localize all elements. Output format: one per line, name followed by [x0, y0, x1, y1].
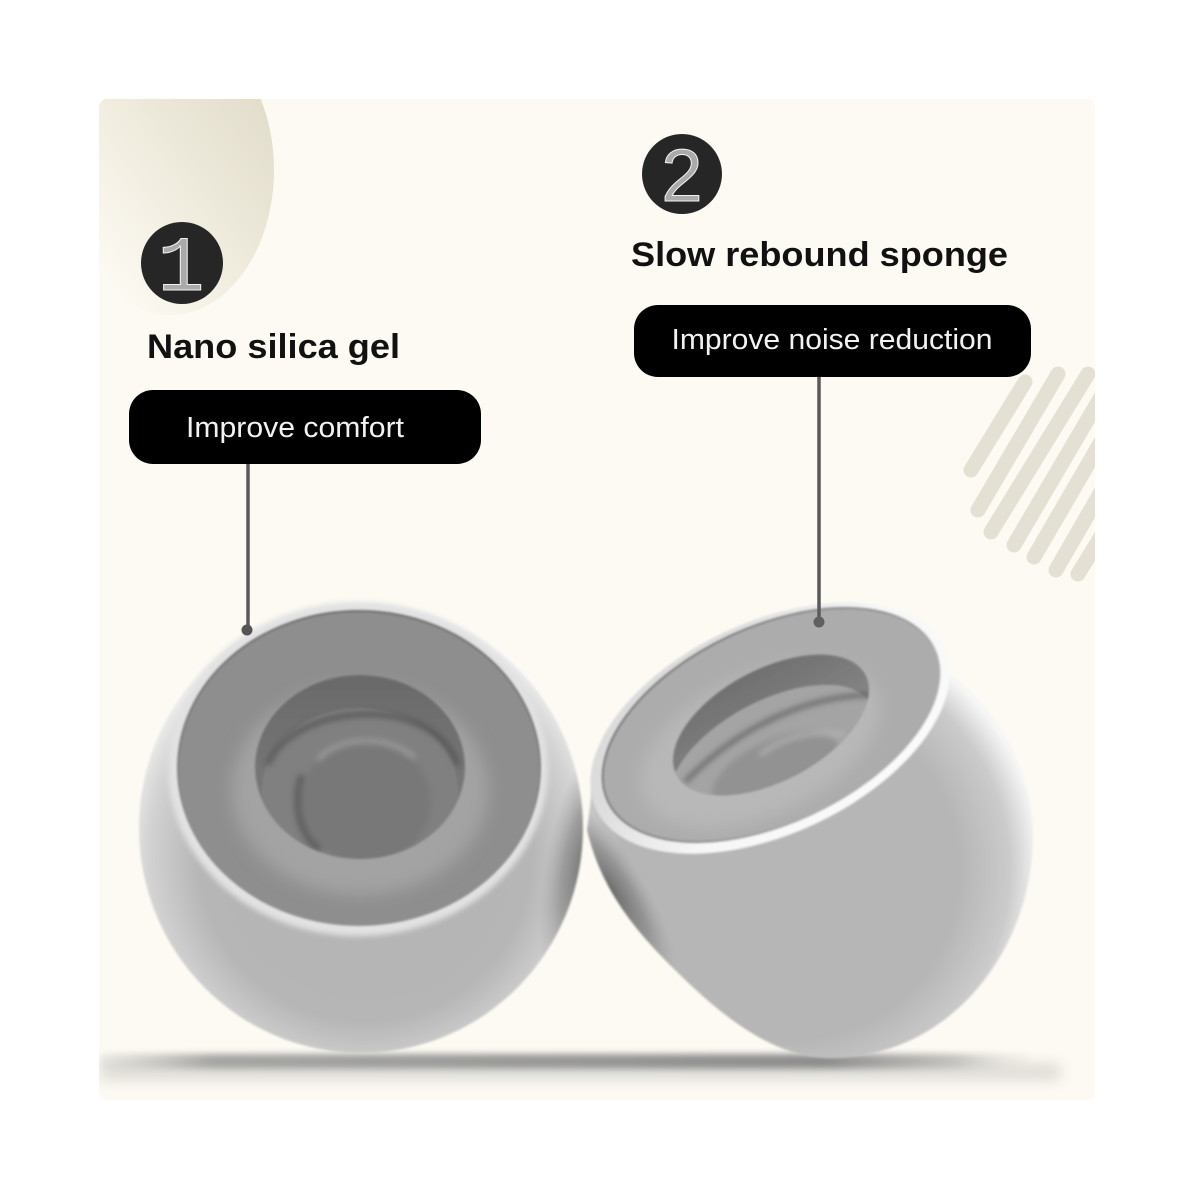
floor shadow — [100, 1054, 1060, 1080]
left tip silica ring — [178, 611, 540, 925]
icon: number 1 badge — [141, 222, 223, 314]
icon: number 2 badge: 2 — [661, 134, 703, 217]
leader line: right — [814, 377, 824, 628]
label pill: Improve noise reduction — [634, 305, 1031, 377]
ear tip: left — [138, 600, 584, 1053]
left tip rim — [168, 602, 548, 936]
right tip inner dome — [712, 733, 837, 796]
right tip rim — [551, 551, 989, 905]
decorative striped circle right — [971, 374, 1105, 574]
label pill: Improve comfort: Improve comfort — [186, 412, 404, 444]
leader line: left — [242, 464, 252, 636]
left tip inner dome — [368, 852, 392, 857]
right tip shell — [586, 680, 1033, 1059]
right tip sponge ring — [600, 606, 942, 844]
icon: number 1 badge: 1 — [158, 226, 204, 314]
heading: Nano silica gel: Nano silica gel — [147, 328, 400, 366]
left tip shell — [138, 638, 584, 1053]
icon: number 2 badge — [642, 134, 722, 217]
ear tip: right — [586, 602, 1033, 1059]
right tip opening — [672, 654, 870, 796]
label pill: Improve noise reduction: Improve noise reduction — [672, 324, 992, 356]
heading: Slow rebound sponge: Slow rebound sponge — [631, 236, 1008, 274]
left tip opening — [255, 675, 465, 872]
label pill: Improve comfort — [129, 390, 481, 464]
decorative blob top-left — [99, 99, 274, 314]
panel: background — [99, 99, 1095, 1100]
